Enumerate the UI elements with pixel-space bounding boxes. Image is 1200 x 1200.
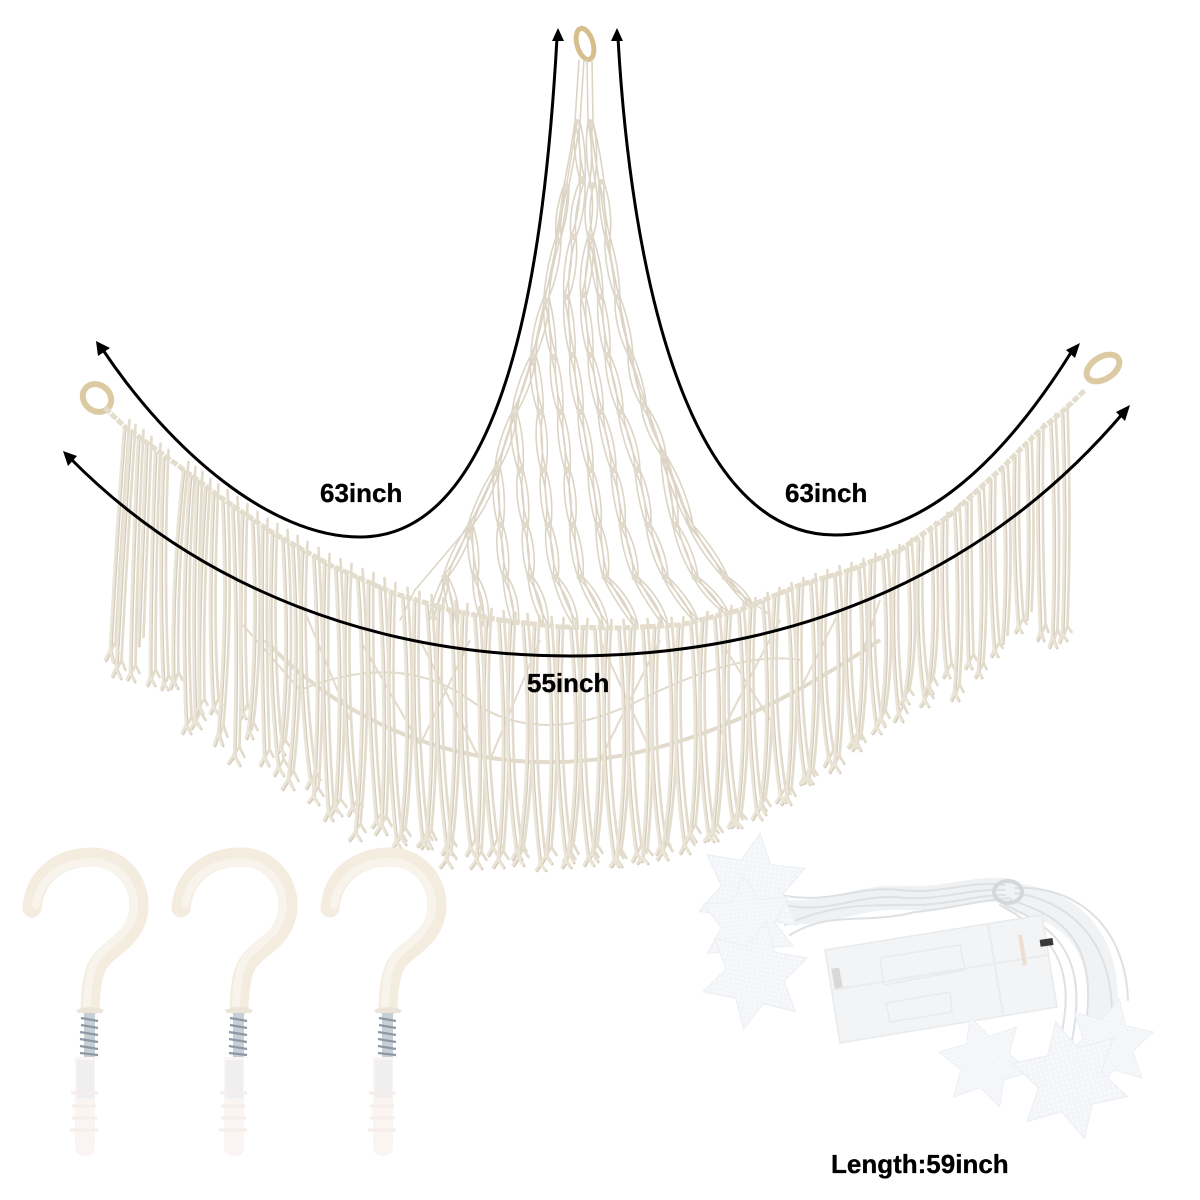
star string lights bbox=[695, 826, 1159, 1151]
macrame net bbox=[77, 26, 1124, 871]
icon: hook three bbox=[330, 857, 437, 1156]
label: 55inch: 55inch bbox=[527, 668, 609, 698]
basket net behind the fringe bbox=[243, 600, 880, 762]
battery box bbox=[825, 915, 1057, 1043]
battery switch bbox=[1040, 938, 1053, 947]
arrow: left 63 inch curve bbox=[96, 28, 564, 537]
wire knot bbox=[994, 881, 1022, 903]
label: right 63inch: 63inch bbox=[785, 478, 867, 508]
wooden ring: left bbox=[77, 378, 117, 418]
rope spine bbox=[105, 390, 1085, 628]
arrow: right 63 inch curve bbox=[611, 28, 1080, 535]
star lights right bbox=[1057, 989, 1159, 1101]
wooden ring: right bbox=[1082, 349, 1124, 387]
mesh knots bbox=[442, 119, 728, 580]
wooden ring: top bbox=[573, 26, 597, 62]
hanging net mesh bbox=[400, 60, 770, 625]
label: left 63inch: 63inch bbox=[320, 478, 402, 508]
star lights left bbox=[695, 826, 809, 954]
star light lower left bbox=[697, 911, 813, 1039]
label: light string length: Length:59inch bbox=[831, 1149, 1009, 1179]
fringe tassels bbox=[105, 406, 1072, 871]
arrow: 55 inch width curve bbox=[63, 405, 1130, 656]
icon: hook two bbox=[181, 857, 288, 1156]
icon: hook one bbox=[32, 857, 139, 1156]
light wires bbox=[780, 884, 1128, 1040]
